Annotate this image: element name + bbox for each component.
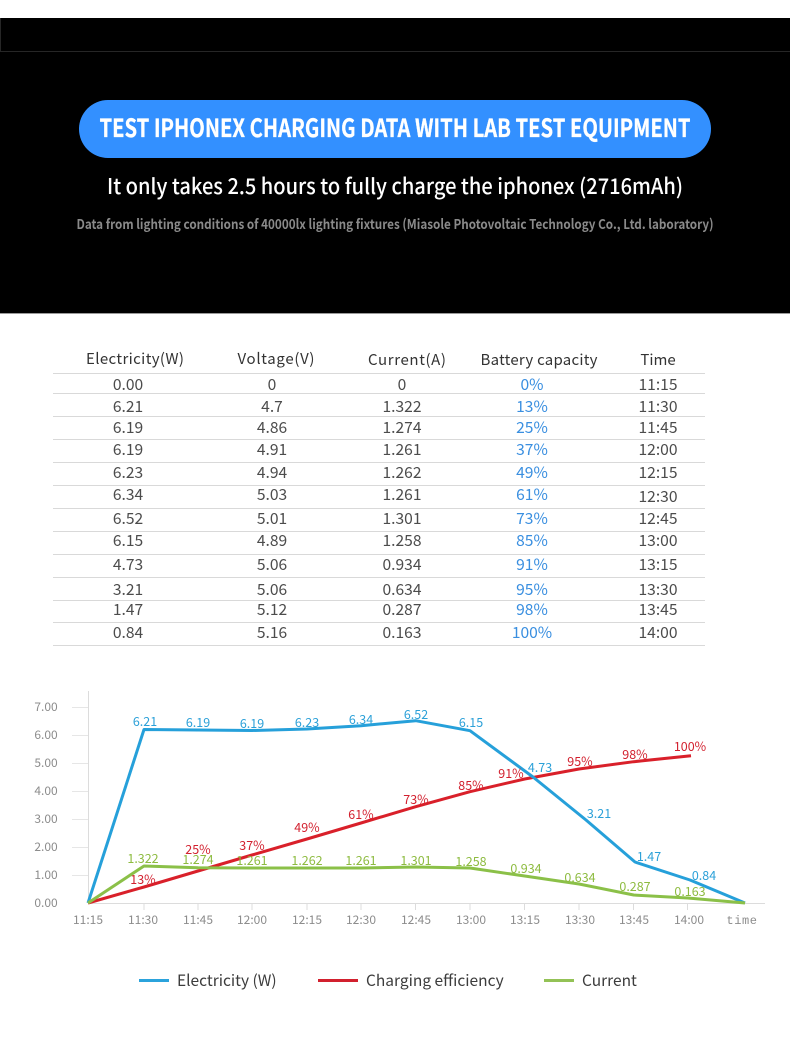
table rows: 0 bbox=[398, 373, 406, 395]
charging efficiency value labels: 13% bbox=[130, 869, 156, 888]
table header: Current(A) bbox=[368, 349, 446, 370]
x axis labels bbox=[73, 911, 758, 928]
legend: current bbox=[544, 969, 637, 991]
table rows: 25% bbox=[516, 416, 548, 438]
line: charging efficiency bbox=[88, 756, 691, 903]
table rows: 6.23 bbox=[113, 461, 143, 483]
data table bbox=[53, 348, 705, 646]
table rows: 0.00 bbox=[113, 373, 143, 395]
current value labels: 1.261 bbox=[345, 850, 377, 869]
table rows: 49% bbox=[516, 461, 548, 483]
y axis labels: 7.00 bbox=[34, 698, 58, 715]
y axis labels: 4.00 bbox=[34, 782, 58, 799]
current value labels: 0.634 bbox=[564, 867, 596, 886]
table rows: 1.258 bbox=[383, 529, 421, 551]
table rows: 5.06 bbox=[257, 553, 287, 575]
table rows: 1.322 bbox=[383, 395, 421, 417]
table rows: 12:00 bbox=[639, 438, 677, 460]
table rows: 4.91 bbox=[257, 438, 287, 460]
charging efficiency value labels: 25% bbox=[185, 839, 211, 858]
table rows: 5.01 bbox=[257, 507, 287, 529]
table rows: 0.287 bbox=[383, 598, 421, 620]
electricity value labels bbox=[133, 704, 716, 884]
x axis labels: 12:45 bbox=[401, 911, 431, 928]
line: electricity bbox=[88, 721, 745, 903]
line chart bbox=[34, 691, 765, 928]
electricity value labels: 6.34 bbox=[349, 709, 373, 728]
table rows: 1.301 bbox=[383, 507, 421, 529]
current value labels: 1.258 bbox=[455, 851, 487, 870]
table rows: 11:30 bbox=[639, 395, 677, 417]
table rows: 61% bbox=[516, 483, 548, 505]
table rows: 1.261 bbox=[383, 438, 421, 460]
x axis labels: time bbox=[726, 914, 758, 928]
table rows: 4.94 bbox=[257, 461, 287, 483]
table rows: 13% bbox=[516, 395, 548, 417]
table rows: 1.262 bbox=[383, 461, 421, 483]
table rows: 5.12 bbox=[257, 598, 287, 620]
table rows: 12:45 bbox=[639, 507, 677, 529]
table rows: 6.15 bbox=[113, 529, 143, 551]
legend: current: Current bbox=[582, 969, 637, 991]
table rows: 1.274 bbox=[383, 416, 422, 438]
table rows: 13:00 bbox=[639, 529, 677, 551]
legend bbox=[139, 969, 637, 991]
table rows: 73% bbox=[516, 507, 548, 529]
legend: charging efficiency: Charging efficiency bbox=[366, 969, 504, 991]
table rows: 0.163 bbox=[383, 621, 421, 643]
current value labels: 1.261 bbox=[236, 850, 268, 869]
table rows: 11:15 bbox=[639, 373, 677, 395]
electricity value labels: 6.23 bbox=[295, 712, 319, 731]
table rows: 6.21 bbox=[113, 395, 143, 417]
table rows: 0% bbox=[520, 373, 544, 395]
charging efficiency value labels: 49% bbox=[294, 817, 320, 836]
charging efficiency value labels: 37% bbox=[239, 835, 265, 854]
electricity value labels: 1.47 bbox=[637, 846, 661, 865]
table rows: 0 bbox=[268, 373, 276, 395]
x axis labels: 11:30 bbox=[128, 911, 158, 928]
table rows: 4.89 bbox=[257, 529, 287, 551]
electricity value labels: 6.15 bbox=[459, 712, 483, 731]
electricity value labels: 4.73 bbox=[528, 757, 552, 776]
electricity value labels: 0.84 bbox=[692, 865, 716, 884]
x axis labels: 13:45 bbox=[619, 911, 649, 928]
table rows: 85% bbox=[516, 529, 548, 551]
current value labels bbox=[127, 848, 706, 900]
table rows: 4.73 bbox=[113, 553, 143, 575]
y axis labels bbox=[34, 698, 58, 911]
table rows: 14:00 bbox=[639, 621, 677, 643]
x axis labels: 12:00 bbox=[237, 911, 267, 928]
table rows: 98% bbox=[516, 598, 548, 620]
table rows: 91% bbox=[516, 553, 548, 575]
y axis labels: 6.00 bbox=[34, 726, 58, 743]
table rows: 6.52 bbox=[113, 507, 143, 529]
current value labels: 1.262 bbox=[291, 850, 323, 869]
charging efficiency value labels: 100% bbox=[674, 736, 707, 755]
x axis labels: 12:30 bbox=[346, 911, 376, 928]
line: current bbox=[88, 866, 745, 903]
x axis labels: 11:15 bbox=[73, 911, 103, 928]
current value labels: 1.322 bbox=[127, 848, 159, 867]
table rows: 0.934 bbox=[383, 553, 422, 575]
table rows: 0.84 bbox=[113, 621, 143, 643]
table rows: 13:15 bbox=[639, 553, 677, 575]
x axis labels: 11:45 bbox=[183, 911, 213, 928]
charging efficiency value labels bbox=[130, 736, 707, 888]
table rows: 4.7 bbox=[261, 395, 283, 417]
table header: Battery capacity bbox=[480, 349, 598, 370]
table rows: 12:15 bbox=[639, 461, 677, 483]
charging efficiency value labels: 98% bbox=[622, 744, 648, 763]
current value labels: 0.163 bbox=[674, 881, 706, 900]
subtitle: It only takes 2.5 hours to fully charge the iphonex (2716mAh) bbox=[107, 170, 683, 201]
charging efficiency value labels: 61% bbox=[348, 804, 374, 823]
table rows: 100% bbox=[512, 621, 552, 643]
electricity value labels: 6.19 bbox=[240, 713, 264, 732]
table header: Time bbox=[640, 349, 676, 370]
table rows: 4.86 bbox=[257, 416, 287, 438]
y axis labels: 3.00 bbox=[34, 810, 58, 827]
y axis labels: 0.00 bbox=[34, 894, 58, 911]
table header: Voltage(V) bbox=[238, 348, 314, 369]
table rows: 6.34 bbox=[113, 483, 143, 505]
table rows: 0.634 bbox=[383, 578, 422, 600]
legend: electricity: Electricity (W) bbox=[177, 969, 277, 991]
table rows: 95% bbox=[516, 578, 548, 600]
x axis labels: 13:00 bbox=[456, 911, 486, 928]
electricity value labels: 6.21 bbox=[133, 711, 157, 730]
electricity value labels: 3.21 bbox=[587, 803, 611, 822]
table header bbox=[86, 348, 676, 370]
table rows: 5.03 bbox=[257, 483, 287, 505]
y axis labels: 5.00 bbox=[34, 754, 58, 771]
charging efficiency value labels: 73% bbox=[403, 789, 429, 808]
charging efficiency value labels: 95% bbox=[567, 751, 593, 770]
table rows: 12:30 bbox=[639, 485, 677, 507]
table rows: 6.19 bbox=[113, 438, 143, 460]
table rows: 5.16 bbox=[257, 621, 287, 643]
panel: black header bbox=[0, 18, 790, 314]
y axis labels: 1.00 bbox=[34, 866, 58, 883]
x axis labels: 14:00 bbox=[674, 911, 704, 928]
table rows: 1.261 bbox=[383, 483, 421, 505]
charging efficiency value labels: 85% bbox=[458, 775, 484, 794]
current value labels: 0.934 bbox=[510, 858, 542, 877]
table rows: 1.47 bbox=[113, 598, 143, 620]
x axis labels: 13:15 bbox=[510, 911, 540, 928]
table rows: 13:45 bbox=[639, 598, 677, 620]
table rows bbox=[113, 373, 677, 643]
table rows: 11:45 bbox=[639, 416, 677, 438]
table rows: 6.19 bbox=[113, 416, 143, 438]
electricity value labels: 6.52 bbox=[404, 704, 428, 723]
table rows: 5.06 bbox=[257, 578, 287, 600]
charging efficiency value labels: 91% bbox=[498, 763, 524, 782]
table rows: 37% bbox=[516, 438, 548, 460]
title pill bbox=[79, 100, 711, 158]
table rows: 3.21 bbox=[113, 578, 143, 600]
table header: Electricity(W) bbox=[86, 348, 184, 369]
table rows: 13:30 bbox=[639, 578, 677, 600]
x axis labels: 13:30 bbox=[565, 911, 595, 928]
y axis labels: 2.00 bbox=[34, 838, 58, 855]
current value labels: 0.287 bbox=[619, 876, 651, 895]
electricity value labels: 6.19 bbox=[186, 712, 210, 731]
x axis labels: 12:15 bbox=[292, 911, 322, 928]
current value labels: 1.301 bbox=[400, 850, 432, 869]
current value labels: 1.274 bbox=[182, 849, 214, 868]
